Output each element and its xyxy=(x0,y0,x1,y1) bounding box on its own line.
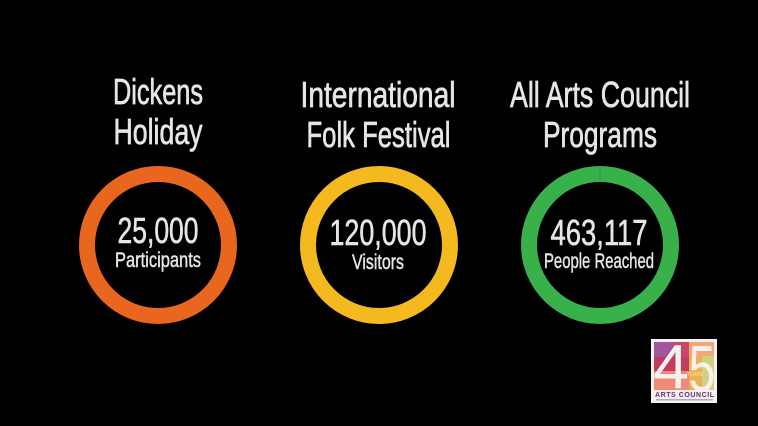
panel: Dickens Holiday xyxy=(87,71,229,316)
stat: 120,000 Visitors: Visitors xyxy=(352,251,404,274)
logo: Arts Council 45 years xyxy=(651,332,717,405)
stat: 25,000 Participants xyxy=(115,210,201,272)
stat: 120,000 Visitors: 120,000 xyxy=(330,212,426,253)
panel: International Folk Festival xyxy=(300,74,456,316)
stat: 25,000 Participants: 25,000 xyxy=(118,210,198,251)
heading: Dickens Holiday: Dickens xyxy=(113,71,203,112)
heading: International Folk Festival: International xyxy=(300,74,456,115)
panel: All Arts Council Programs xyxy=(510,74,690,316)
stat: 463,117 People Reached xyxy=(544,212,654,273)
heading: All Arts Council Programs xyxy=(510,74,690,155)
ring: orange xyxy=(87,174,229,316)
heading: Dickens Holiday: Holiday xyxy=(114,111,202,152)
heading: All Arts Council Programs: All Arts Council xyxy=(510,74,690,115)
stat: 463,117 People Reached: People Reached xyxy=(544,250,654,273)
heading: International Folk Festival: Folk Festival xyxy=(306,114,450,155)
stat: 25,000 Participants: Participants xyxy=(115,249,201,272)
heading: International Folk Festival xyxy=(300,74,456,155)
logo wordmark: ARTS COUNCIL xyxy=(655,392,715,399)
logo: Arts Council 45 years: 5 xyxy=(688,332,716,405)
years label: YEARS xyxy=(687,372,704,378)
heading: Dickens Holiday xyxy=(113,71,203,152)
numeral 45: 4 xyxy=(653,333,689,402)
stat: 463,117 People Reached: 463,117 xyxy=(550,212,648,253)
ring: yellow xyxy=(308,174,450,316)
ring: green xyxy=(529,174,671,316)
stat: 120,000 Visitors xyxy=(330,212,426,274)
heading: All Arts Council Programs: Programs xyxy=(543,114,657,155)
